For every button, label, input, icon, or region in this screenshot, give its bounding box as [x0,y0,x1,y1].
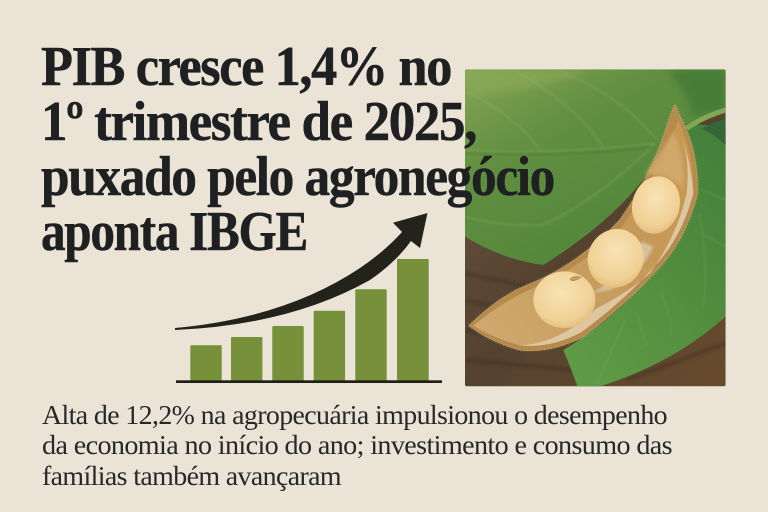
bar 3 [272,326,304,381]
bean top [632,176,680,234]
bar 5 [355,289,387,381]
infographic canvas [41,47,726,491]
dark leaf gap below stem [702,118,726,145]
bean middle [588,229,644,288]
pod [469,105,697,351]
bean bottom [533,271,595,328]
bar 2 [231,337,262,381]
subtitle: Alta de 12,2% na agropecuária impulsionou o desempenho [42,400,667,430]
wood table surface [465,69,726,386]
stem [687,110,726,128]
chart baseline [176,380,442,383]
right lower leaf [563,123,726,386]
subtitle [42,400,672,491]
title [41,36,554,263]
bar 1 [190,345,222,381]
chart: rising bars with arrow [175,213,442,383]
title: puxado pelo agronegócio [41,146,554,208]
bar 4 [314,311,345,381]
bar 6 [397,259,429,381]
photo: soybean pod on leaves [465,69,726,386]
bean hilum [570,276,581,281]
title: aponta IBGE [41,201,307,263]
title: PIB cresce 1,4% no [41,36,451,98]
title: 1º trimestre de 2025, [41,91,476,153]
growth arrow [175,213,428,330]
subtitle: da economia no início do ano; investimento e consumo das [42,430,672,460]
subtitle: famílias também avançaram [42,461,342,491]
large top leaf [465,69,726,265]
